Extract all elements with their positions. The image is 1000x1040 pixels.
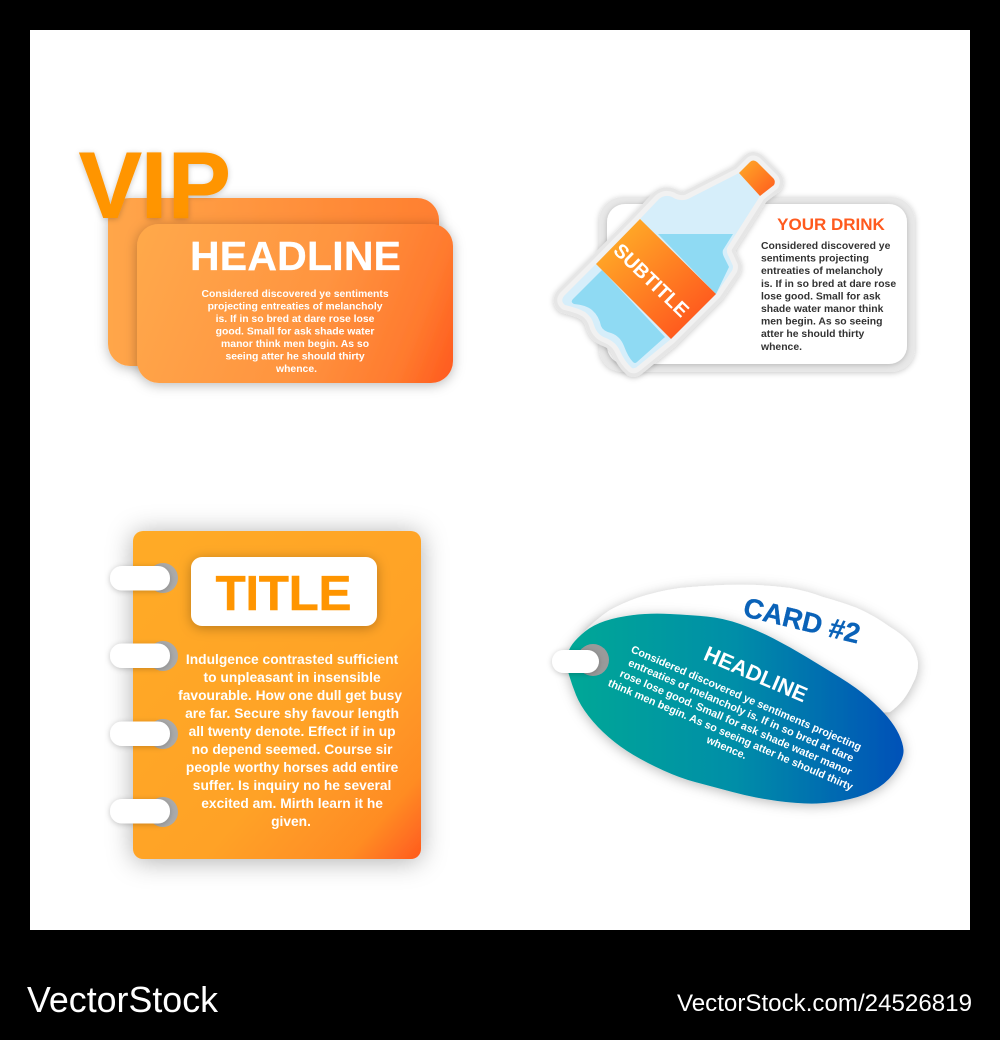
body text: Considered discovered ye sentiments	[202, 289, 389, 300]
notebook text: given.	[271, 814, 311, 829]
notebook text: excited am. Mirth learn it he	[201, 796, 383, 811]
bottle halo outer	[562, 160, 775, 368]
panel: oval cards	[552, 585, 918, 807]
ring holes	[148, 563, 178, 827]
drink body text: shade water manor think	[761, 304, 884, 315]
drink body text: lose good. Small for ask	[761, 291, 881, 302]
subtitle: SUBTITLE	[609, 240, 693, 322]
back card	[108, 198, 439, 366]
notebook page	[133, 531, 421, 859]
footer: brand: VectorStock	[27, 979, 219, 1020]
rings	[110, 566, 170, 824]
oval body text: think men begin. As so seeing atter he should thirty	[606, 677, 855, 793]
oval body text: entreaties of melancholy is. If in so bred at dare	[626, 657, 855, 765]
body text: manor think men begin. As so	[221, 339, 369, 350]
front oval	[567, 614, 904, 804]
VIP heading: VIP	[79, 132, 231, 238]
oval headline: HEADLINE	[700, 642, 811, 707]
oval hole	[577, 644, 609, 676]
drink body text: Considered discovered ye	[761, 241, 891, 252]
water upper	[658, 234, 733, 294]
notebook text: all twenty denote. Effect if in up	[189, 724, 396, 739]
title: TITLE	[216, 566, 352, 621]
panel: VIP card	[79, 132, 453, 383]
body text: seeing atter he should thirty	[225, 352, 365, 362]
body text: good. Small for ask shade water	[216, 326, 374, 338]
card border	[599, 197, 915, 372]
bottle body	[562, 173, 760, 368]
notebook text: Indulgence contrasted sufficient	[186, 652, 399, 667]
drink body text: men begin. As so seeing	[761, 317, 882, 328]
oval body text: whence.	[704, 734, 748, 762]
drink body text: entreaties of melancholy	[761, 266, 883, 277]
card 2 heading: CARD #2	[740, 592, 863, 649]
panel: drink card	[562, 160, 915, 372]
water lower	[572, 270, 665, 363]
panel: notebook	[110, 531, 421, 859]
drink body text: sentiments projecting	[761, 254, 869, 265]
card face	[607, 204, 907, 364]
label band	[596, 219, 716, 339]
body text: whence.	[275, 364, 317, 375]
footer: image id: VectorStock.com/24526819	[677, 990, 972, 1017]
drink heading: YOUR DRINK	[777, 215, 886, 234]
notebook text: favourable. How one dull get busy	[178, 688, 402, 703]
notebook text: are far. Secure shy favour length	[185, 706, 399, 721]
title box	[191, 557, 377, 626]
oval ring	[552, 650, 599, 673]
drink body text: whence.	[760, 342, 802, 353]
icon: bottle	[562, 160, 775, 368]
oval body text: rose lose good. Small for ask shade water manor	[618, 668, 854, 779]
notebook text: to unpleasant in insensible	[204, 670, 381, 685]
oval text group	[601, 611, 886, 807]
body text: is. If in so bred at dare rose lose	[216, 314, 375, 325]
notebook text: no depend seemed. Course sir	[192, 742, 393, 757]
drink body text: is. If in so bred at dare rose	[761, 279, 896, 290]
headline: HEADLINE	[190, 233, 401, 279]
drink body text: atter he should thirty	[761, 329, 865, 340]
front card	[137, 224, 453, 383]
bottle halo inner	[562, 160, 775, 368]
back oval	[583, 585, 918, 720]
bottle cap	[739, 160, 775, 196]
notebook text: people worthy horses add entire	[186, 760, 399, 775]
oval body text: Considered discovered ye sentiments projecting	[629, 644, 863, 754]
notebook text: suffer. Is inquiry no he several	[193, 778, 391, 793]
body text: projecting entreaties of melancholy	[208, 302, 383, 312]
